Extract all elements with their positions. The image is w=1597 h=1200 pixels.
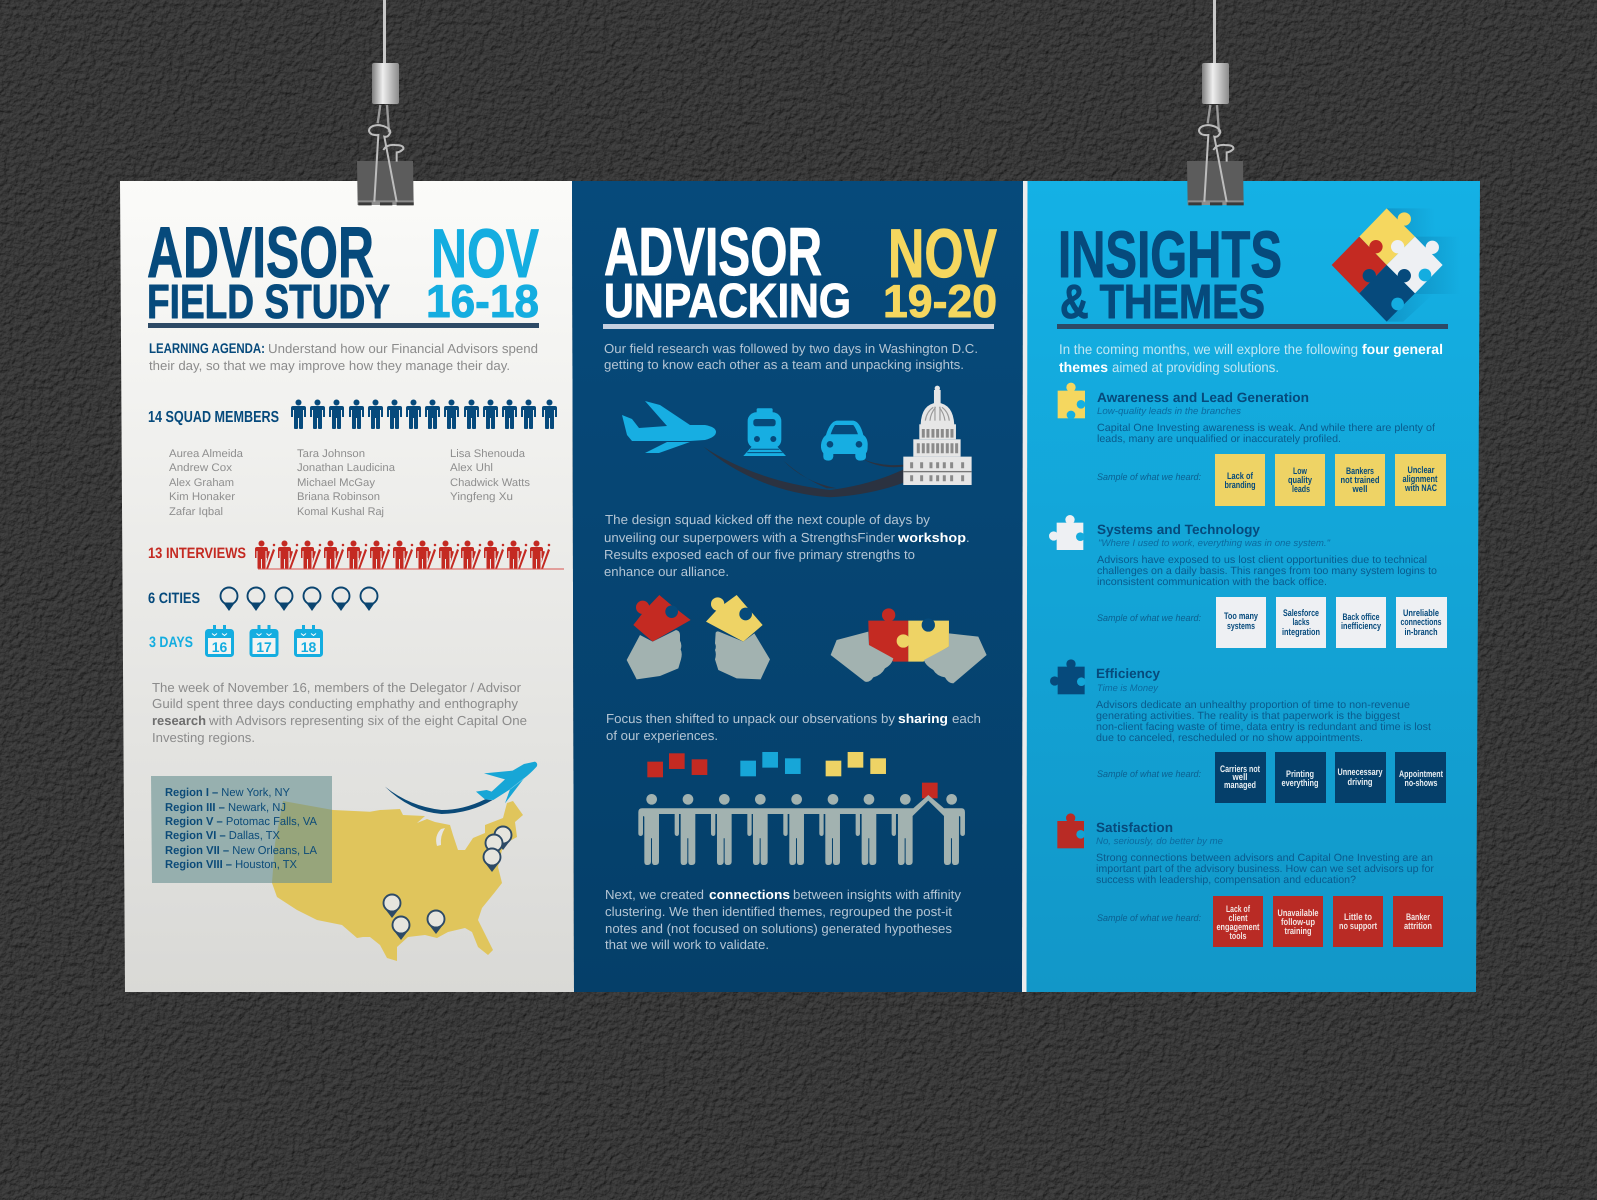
connections paragraph: connections [709,887,790,902]
interviews label: 13 INTERVIEWS [148,545,246,562]
icon: yellow puzzle piece [1058,383,1085,419]
connections paragraph: clustering. We then identified themes, regrouped the post-it [605,904,952,919]
sample quotes: Little to [1344,912,1372,923]
squad names: Jonathan Laudicina [297,462,396,474]
icon: 14 people [291,400,557,429]
intro paragraph [604,341,978,372]
sample quotes [1215,454,1446,506]
heading: Satisfaction [1096,820,1173,835]
body: Advisors have exposed to us lost client opportunities due to technical [1097,554,1427,566]
body [1097,554,1437,588]
sample quotes: systems [1227,621,1255,632]
icon: plane [476,762,537,803]
workshop paragraph: unveiling our superpowers with a StrengthsFinder [604,530,896,545]
body: inconsistent communication with the back office. [1097,576,1327,588]
squad members label: 14 SQUAD MEMBERS [148,409,279,426]
title [1058,217,1282,329]
title: ADVISOR [604,214,822,290]
date: 19-20 [883,275,997,327]
body: non-client facing waste of time, data entry is redundant and time is lost [1096,721,1431,733]
sample quotes: Unclear [1408,465,1435,476]
icon: team sharing notes [638,752,965,865]
intro paragraph [1059,341,1443,375]
sample quotes: Back office [1342,612,1380,623]
learning agenda: Understand how our Financial Advisors spend [268,341,538,356]
squad names: Kim Honaker [169,491,235,503]
sample quotes: branding [1224,480,1256,491]
icon: 13 interview people [255,540,564,570]
panel: advisor unpacking [572,181,1023,992]
body: generating activities. The reality is that paperwork is the biggest [1096,710,1400,722]
sample quotes: Carriers not [1220,764,1261,775]
map of the United States with pins [151,762,537,961]
subheading: Low-quality leads in the branches [1097,406,1241,417]
squad names: Andrew Cox [169,462,233,474]
icon: train [743,408,786,456]
sample quotes: no support [1339,921,1378,932]
red piece in hand [627,595,691,679]
theme: satisfaction [1057,813,1443,947]
icon: 3 calendars: 18 [301,639,316,655]
region list box [151,776,332,883]
date: NOV [888,215,997,292]
body: Capital One Investing awareness is weak. And while there are plenty of [1097,422,1435,434]
connections paragraph: that we will work to validate. [605,937,769,952]
heading: Awareness and Lead Generation [1097,390,1309,405]
flight trail [385,787,493,814]
body: leads, many are unqualified or inaccurately profiled. [1097,433,1341,445]
body [1097,422,1435,445]
workshop paragraph: The design squad kicked off the next couple of days by [605,512,930,527]
icon: plane [622,401,716,453]
sticky notes [647,752,938,798]
sample quotes: with NAC [1404,483,1437,494]
sample quotes: training [1284,926,1312,937]
lake [436,828,445,846]
region list box: Region III – Newark, NJ [165,802,286,814]
theme: awareness and lead generation [1058,383,1446,506]
sample quotes: Too many [1224,611,1259,622]
squad names: Komal Kushal Raj [297,506,384,518]
intro paragraph: themes [1059,359,1108,375]
body: important part of the advisory business. How can we set advisors up for [1096,863,1435,875]
subheading: Time is Money [1097,683,1159,694]
icon: navy puzzle piece [1050,659,1086,694]
paper [572,181,1023,992]
title: UNPACKING [604,275,851,328]
sample quotes: managed [1224,780,1256,791]
workshop paragraph: enhance our alliance. [604,564,729,579]
icon: 3 calendars: 16 [212,639,227,655]
sample quotes: Printing [1286,769,1314,780]
research paragraph: The week of November 16, members of the Delegator / Advisor [152,680,522,695]
sample quotes: Banker [1406,912,1430,923]
learning agenda [149,340,538,373]
workshop paragraph [604,512,970,579]
research paragraph: Investing regions. [152,730,255,745]
panel: insights and themes [1022,181,1480,992]
sample label: Sample of what we heard: [1097,472,1201,483]
squad names: Yingfeng Xu [450,491,513,503]
yellow piece in hand [706,595,770,679]
sample quotes: inefficiency [1341,621,1382,632]
squad names: Tara Johnson [297,448,365,460]
sample quotes: lacks [1292,617,1310,628]
sample quotes: connections [1400,617,1442,628]
body: Strong connections between advisors and Capital One Investing are an [1096,852,1433,864]
squad names: Lisa Shenouda [450,448,526,460]
title: ADVISOR [147,213,374,293]
intro paragraph: aimed at providing solutions. [1112,359,1279,375]
connections paragraph: notes and (not focused on solutions) generated hypotheses [605,921,952,936]
icon: capitol building [903,386,972,485]
sample quotes: Unavailable [1278,908,1318,919]
sample quotes: attrition [1404,921,1432,932]
connections paragraph: between insights with affinity [793,887,961,902]
theme: systems and technology [1049,515,1447,648]
sharing paragraph: sharing [898,711,948,726]
sample quotes: tools [1230,931,1246,942]
subheading: "Where I used to work, everything was in one system." [1098,538,1331,549]
sharing paragraph [606,711,981,743]
theme: efficiency [1050,659,1446,803]
row of people [638,794,965,865]
region list box: Region VIII – Houston, TX [165,859,297,871]
icon: white puzzle piece [1049,515,1085,550]
intro paragraph: getting to know each other as a team and unpacking insights. [604,357,964,372]
sample quotes: Appointment [1399,769,1444,780]
sample quotes: Lack of [1226,904,1251,915]
sample quotes: no-shows [1404,778,1438,789]
title [604,214,851,328]
paper fold strip [1022,181,1028,992]
sample quotes: Bankers [1346,466,1374,477]
region list box: Region VI – Dallas, TX [165,830,280,842]
sample quotes: Low [1293,466,1307,477]
days label: 3 DAYS [149,634,193,651]
sample quotes: quality [1288,475,1313,486]
squad names: Aurea Almeida [169,448,244,460]
heading: Efficiency [1096,666,1160,681]
icon: 3 calendars [205,625,323,657]
title [147,213,390,329]
squad names: Alex Uhl [450,462,493,474]
sample quotes: everything [1282,778,1319,789]
icon: 6 map pins [220,588,378,611]
sample quotes: Unnecessary [1338,767,1383,778]
sample quotes: not trained [1340,475,1380,486]
sample label: Sample of what we heard: [1097,913,1201,924]
body [1096,699,1431,744]
title: INSIGHTS [1058,217,1282,291]
sample quotes: Lack of [1227,471,1254,482]
icon: car [821,421,868,461]
sample quotes: leads [1292,484,1310,495]
right hanging wire and binder clip [1187,0,1244,205]
sample quotes [1215,752,1446,803]
workshop paragraph: Results exposed each of our five primary strengths to [604,547,915,562]
squad names: Zafar Iqbal [169,506,223,518]
sample quotes: follow-up [1281,917,1315,928]
cities label: 6 CITIES [148,590,200,607]
map shape [272,801,523,961]
heading: Systems and Technology [1097,522,1260,537]
title: FIELD STUDY [147,276,390,329]
sample quotes: Salesforce [1283,608,1319,619]
sample quotes [1216,597,1447,648]
body: challenges on a daily basis. This ranges from too many system logins to [1097,565,1437,577]
sharing paragraph: Focus then shifted to unpack our observations by [606,711,896,726]
sample quotes: well [1352,484,1368,495]
left hanging wire and binder clip [357,0,414,205]
region list box: Region V – Potomac Falls, VA [165,816,317,828]
title: & THEMES [1060,276,1265,329]
sharing paragraph: each [952,711,981,726]
sample quotes: Unreliable [1403,608,1439,619]
research paragraph: research [152,713,206,728]
date [426,215,539,327]
learning agenda: LEARNING AGENDA: [149,340,265,356]
squad names: Briana Robinson [297,491,380,503]
region list box: Region I – New York, NY [165,787,290,799]
region list box: Region VII – New Orleans, LA [165,845,317,857]
joined pieces in hands [831,608,987,683]
intro paragraph: In the coming months, we will explore the following [1059,341,1358,357]
squad names [169,448,531,518]
body [1096,852,1435,886]
sample quotes: in-branch [1404,627,1438,638]
learning agenda: their day, so that we may improve how they manage their day. [149,358,510,373]
connections paragraph: Next, we created [605,887,704,902]
sample quotes: engagement [1216,922,1260,933]
body: Advisors dedicate an unhealthy proportion of time to non-revenue [1096,699,1410,711]
icon: red puzzle piece [1057,813,1085,848]
squad names: Chadwick Watts [450,477,531,489]
squad names: Alex Graham [169,477,234,489]
sample quotes: alignment [1402,474,1438,485]
sample quotes [1213,896,1443,947]
research paragraph: Guild spent three days conducting emphathy and enthography [152,696,519,711]
date [883,215,997,327]
date: 16-18 [426,275,539,327]
workshop paragraph: . [966,530,970,545]
icon: 3 calendars: 17 [256,639,272,655]
sample quotes: integration [1282,627,1320,638]
intro paragraph: four general [1362,341,1443,357]
panel: advisor field study [120,181,574,992]
map pins [384,826,512,940]
sample label: Sample of what we heard: [1097,613,1201,624]
research paragraph [152,680,527,745]
sample quotes: client [1228,913,1248,924]
date: NOV [431,215,539,292]
connections paragraph [605,887,961,952]
intro paragraph: Our field research was followed by two days in Washington D.C. [604,341,978,356]
icon: four-piece puzzle diamond [1332,208,1460,322]
body: due to canceled, rescheduled or no show appointments. [1096,732,1363,744]
body: success with leadership, compensation and education? [1096,874,1356,886]
sample quotes: driving [1348,777,1373,788]
icon: hands holding puzzle pieces [627,595,987,683]
subheading: No, seriously, do better by me [1096,836,1223,847]
sample quotes: well [1232,772,1248,783]
sharing paragraph: of our experiences. [606,728,718,743]
paper [120,181,574,992]
paper [1026,181,1480,992]
workshop paragraph: workshop [897,530,966,545]
squad names: Michael McGay [297,477,376,489]
sample label: Sample of what we heard: [1097,769,1201,780]
travel trails [703,447,904,497]
research paragraph: with Advisors representing six of the eight Capital One [208,713,527,728]
